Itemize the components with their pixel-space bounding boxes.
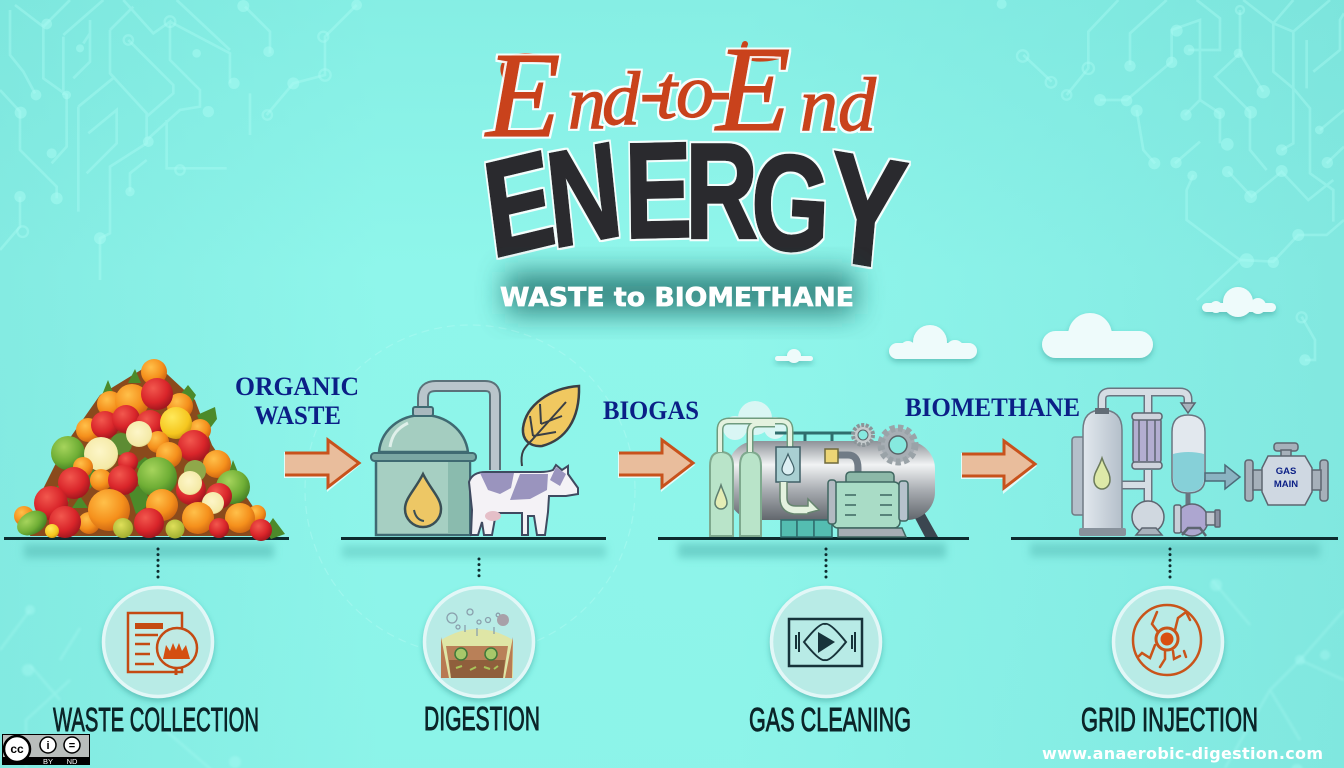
cloud large — [1042, 313, 1153, 358]
arrow 3 — [961, 439, 1037, 494]
arrow 2 — [618, 438, 695, 492]
subtitle: WASTE to BIOMETHANE — [500, 283, 854, 313]
cloud small — [775, 349, 813, 363]
step 1 badge: waste collection — [104, 588, 212, 696]
stage 3: gas cleaning — [658, 421, 969, 558]
gears — [853, 425, 915, 462]
leaf — [523, 386, 579, 446]
yellow fitting — [826, 455, 858, 478]
stage 1: fruit pile — [4, 359, 289, 558]
ground line and shadow — [1011, 537, 1338, 557]
ground line and shadow — [658, 537, 969, 558]
leaves — [45, 369, 285, 539]
top rail — [775, 433, 870, 441]
cloud middle — [889, 325, 977, 359]
label: organic waste — [235, 372, 359, 430]
pipes — [720, 421, 790, 452]
stage 2: digester with cow — [341, 386, 606, 558]
licence badge — [2, 734, 90, 766]
label: gas cleaning: GAS CLEANING — [749, 701, 911, 738]
icon: bacteria ring — [1133, 605, 1201, 675]
arrow 1 — [284, 438, 360, 492]
label: biomethane: BIOMETHANE — [905, 393, 1080, 422]
icon: soil cross-section — [441, 609, 513, 678]
label: organic waste: ORGANIC — [235, 372, 359, 401]
ground line and shadow — [4, 537, 289, 558]
label: biogas: BIOGAS — [603, 396, 699, 425]
cloud far right — [1202, 287, 1276, 317]
flow arrow — [780, 482, 819, 514]
title: ENERGY: ENERGY — [476, 114, 913, 305]
step 3 badge: gas cleaning — [772, 588, 880, 696]
output arrow — [1205, 465, 1240, 489]
pump — [828, 472, 908, 537]
licence badge: i — [46, 740, 50, 752]
stage 4: grid injection — [1011, 392, 1338, 557]
pile base — [30, 362, 262, 536]
label: grid injection: GRID INJECTION — [1081, 701, 1258, 738]
licence badge: ND — [67, 757, 78, 766]
indicator box — [776, 447, 800, 482]
vessel — [1172, 415, 1205, 493]
licence badge: BY — [43, 757, 53, 766]
cylinders — [710, 452, 761, 536]
tank — [728, 441, 935, 520]
licence badge: = — [69, 740, 75, 752]
gas main label: MAIN — [1274, 479, 1298, 490]
title: End-to-End: End-to-End — [484, 22, 877, 163]
gas main label — [1274, 466, 1298, 490]
subtitle shadow — [505, 272, 855, 314]
label: digestion: DIGESTION — [424, 700, 540, 737]
label: waste collection: WASTE COLLECTION — [53, 701, 259, 738]
connector dots — [158, 549, 1170, 580]
cloud behind gas cleaning — [723, 401, 786, 440]
website: www.anaerobic-digestion.com — [1042, 744, 1323, 763]
pipe — [423, 386, 495, 470]
pumps — [1132, 501, 1220, 536]
icon: play frame — [789, 619, 862, 666]
grid base — [781, 520, 832, 537]
top pipe — [1102, 392, 1188, 505]
tank — [376, 460, 470, 535]
filter — [1132, 413, 1162, 469]
cow — [469, 465, 578, 535]
icon: document and lens — [128, 613, 197, 675]
licence badge: cc — [10, 742, 24, 756]
faint circle behind digester — [305, 325, 635, 655]
drop — [405, 474, 441, 527]
side plate — [1072, 437, 1085, 515]
ground line and shadow — [341, 537, 606, 558]
gas main valve — [1245, 443, 1328, 505]
step 2 badge: digestion — [424, 588, 534, 696]
circuit pattern lower corners — [0, 579, 1344, 768]
circuit pattern top left — [0, 0, 362, 280]
label: organic waste: WASTE — [254, 401, 341, 430]
gas main label: GAS — [1276, 466, 1296, 477]
circuit pattern top right — [997, 0, 1344, 366]
step 4 badge: grid injection — [1114, 588, 1222, 696]
column — [1083, 410, 1122, 535]
leg — [908, 505, 938, 537]
